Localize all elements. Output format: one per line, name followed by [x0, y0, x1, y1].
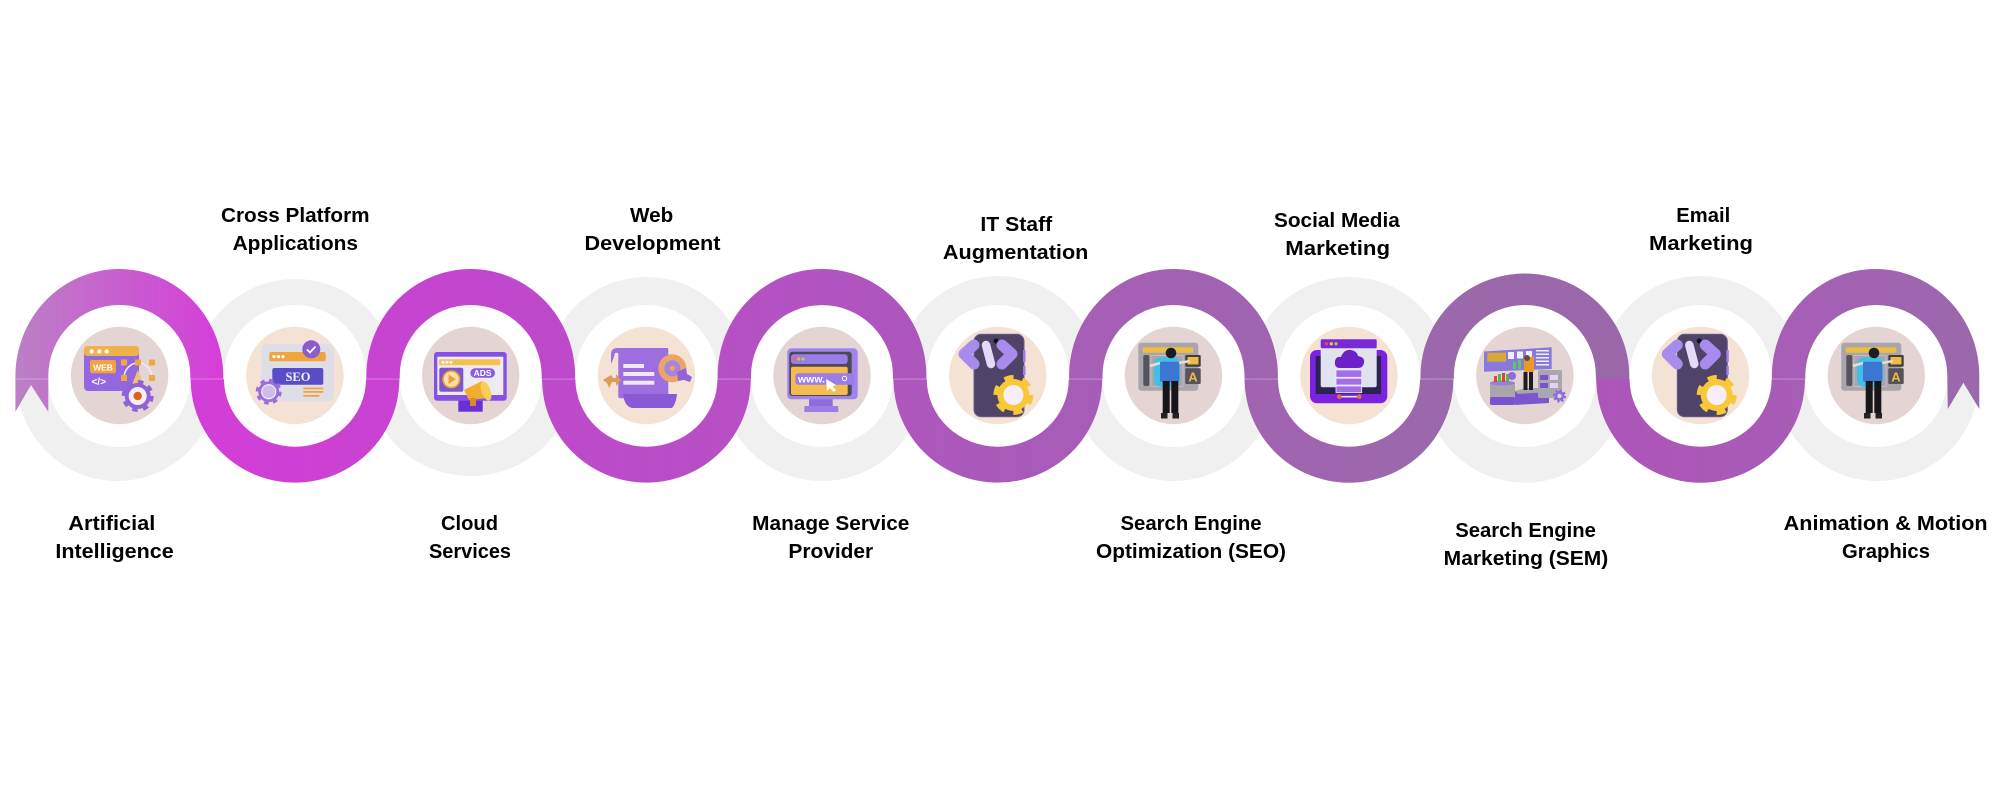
grey background arcs — [16, 276, 1979, 483]
ribbon segment 10 — [1596, 379, 1805, 483]
label: Cloud Services: Services — [429, 540, 511, 563]
ribbon segment 5 — [718, 269, 926, 379]
label: Search Engine Optimization (SEO) — [1096, 512, 1286, 563]
icon: animator at design board — [1828, 327, 1925, 424]
label: Search Engine Optimization (SEO): Search Engine — [1120, 512, 1262, 535]
icon: designer at SEO board: A — [1188, 370, 1198, 384]
label: Artificial Intelligence — [55, 512, 174, 563]
label: Social Media Marketing: Social Media — [1274, 209, 1400, 232]
icon: SEO card: SEO — [285, 370, 311, 384]
icon: managed service monitor — [773, 327, 871, 424]
label: Email Marketing — [1649, 204, 1753, 255]
label: Cloud Services — [429, 512, 511, 563]
ribbon segment 9 — [1420, 274, 1629, 379]
label: Cross Platform Applications: Cross Platform — [221, 204, 370, 227]
label: Manage Service Provider: Manage Service — [752, 512, 909, 535]
icon: web development scroll — [598, 327, 695, 424]
label: Email Marketing: Email — [1676, 204, 1730, 227]
ribbon segment 2 — [191, 379, 399, 483]
label: Social Media Marketing — [1274, 209, 1400, 260]
purple wave ribbon — [15, 269, 1979, 483]
label: Web Development — [584, 204, 721, 255]
label: Web Development: Web — [630, 204, 673, 227]
label: Email Marketing: Marketing — [1649, 232, 1753, 255]
label: Animation & Motion Graphics: Animation & Motion — [1784, 512, 1988, 535]
label: Social Media Marketing: Marketing — [1285, 237, 1390, 260]
label: Manage Service Provider: Provider — [788, 540, 873, 563]
label: Animation & Motion Graphics: Graphics — [1842, 540, 1930, 563]
label: Artificial Intelligence: Intelligence — [55, 540, 174, 563]
icon: SEO card — [246, 327, 344, 424]
label: Search Engine Marketing (SEM): Search Engine — [1455, 519, 1596, 542]
label: IT Staff Augmentation: IT Staff — [980, 213, 1052, 236]
label: Web Development: Development — [584, 232, 721, 255]
label: Cross Platform Applications: Applications — [233, 232, 358, 255]
icon: web design: </> — [91, 377, 106, 388]
ribbon segment 7 — [1069, 269, 1278, 379]
icon: managed service monitor: www. — [797, 374, 825, 386]
icon: code phone with gear — [949, 327, 1046, 424]
ribbon segment 4 — [542, 379, 751, 483]
label: Search Engine Marketing (SEM) — [1444, 519, 1608, 570]
icon: designer at SEO board — [1125, 327, 1222, 424]
label: Cloud Services: Cloud — [441, 512, 498, 535]
icon: ads monitor: ADS — [474, 368, 492, 378]
label: Search Engine Marketing (SEM): Marketing (SEM) — [1444, 547, 1608, 570]
label: IT Staff Augmentation: Augmentation — [943, 241, 1088, 264]
ribbon segment 11 with arrow tail — [1772, 269, 1979, 409]
icon: animator at design board: A — [1891, 370, 1901, 384]
icon: social cloud window — [1300, 327, 1398, 424]
ribbon segment 8 — [1245, 379, 1453, 483]
label: IT Staff Augmentation — [943, 213, 1088, 264]
ribbon segment 6 — [893, 379, 1102, 483]
icon: ads monitor — [422, 327, 519, 424]
label: Animation & Motion Graphics — [1784, 512, 1988, 563]
label: Artificial Intelligence: Artificial — [68, 512, 155, 535]
label: Cross Platform Applications — [221, 204, 370, 255]
label: Manage Service Provider — [752, 512, 909, 563]
icon: web design — [71, 327, 168, 424]
icon: email code phone with gear — [1652, 327, 1749, 424]
icon: web design: WEB — [93, 362, 113, 372]
icon: marketing analytics scene — [1476, 327, 1574, 424]
ribbon segment 3 — [366, 269, 575, 379]
label: Search Engine Optimization (SEO): Optimization (SEO) — [1096, 540, 1286, 563]
ribbon segment 1 with start tail — [15, 269, 223, 412]
